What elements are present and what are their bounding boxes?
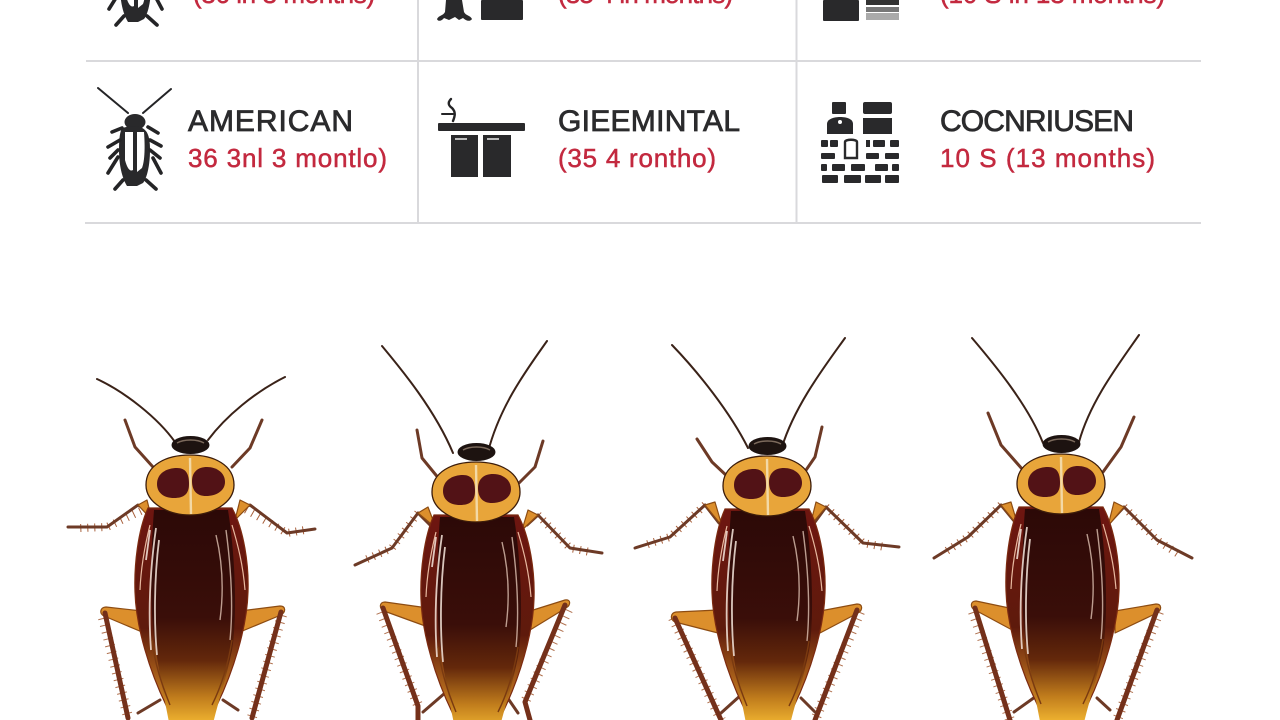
icon: cockroach silhouette [98,88,171,189]
row 2 cell: bricks [821,102,1155,183]
row 1 cell: roach species [99,0,375,25]
body [1006,435,1119,720]
illustration: cockroach 2 [355,341,602,720]
species name: COCNRIUSEN [940,105,1134,138]
antennae [972,335,1139,443]
row 1 cell: sink habitat [437,0,733,21]
icon: plant and cabinet, top row [437,0,523,21]
lifespan text: 36 3nl 3 montlo) [188,143,387,173]
species name: American: AMERICAN [188,105,353,138]
legs [934,413,1192,720]
lifespan text: (35 4 rontho) [558,143,716,173]
legs [635,427,899,720]
antennae [382,341,547,453]
icon: boxes, top row [823,0,899,21]
icon: cockroach silhouette, top row [99,0,172,25]
antennae [97,377,285,442]
row 1 cell: storage habitat [823,0,1165,21]
table grid [85,0,1201,223]
icon: kitchen counter with faucet [438,99,525,177]
row 2 cell: kitchen [438,99,740,177]
illustration: cockroach 3 [635,338,899,720]
lifespan text: 10 S (13 months) [940,143,1155,173]
row 2 cell: American [98,88,387,189]
body [135,436,248,720]
legs [355,430,602,720]
illustration: cockroach 4 [934,335,1192,720]
illustration: cockroach 1 [68,377,315,720]
body [712,437,825,720]
legs [68,420,315,718]
antennae [672,338,845,448]
body [421,443,534,720]
icon: bricks and boxes [821,102,899,183]
species name: GIEEMINTAL [558,105,740,138]
